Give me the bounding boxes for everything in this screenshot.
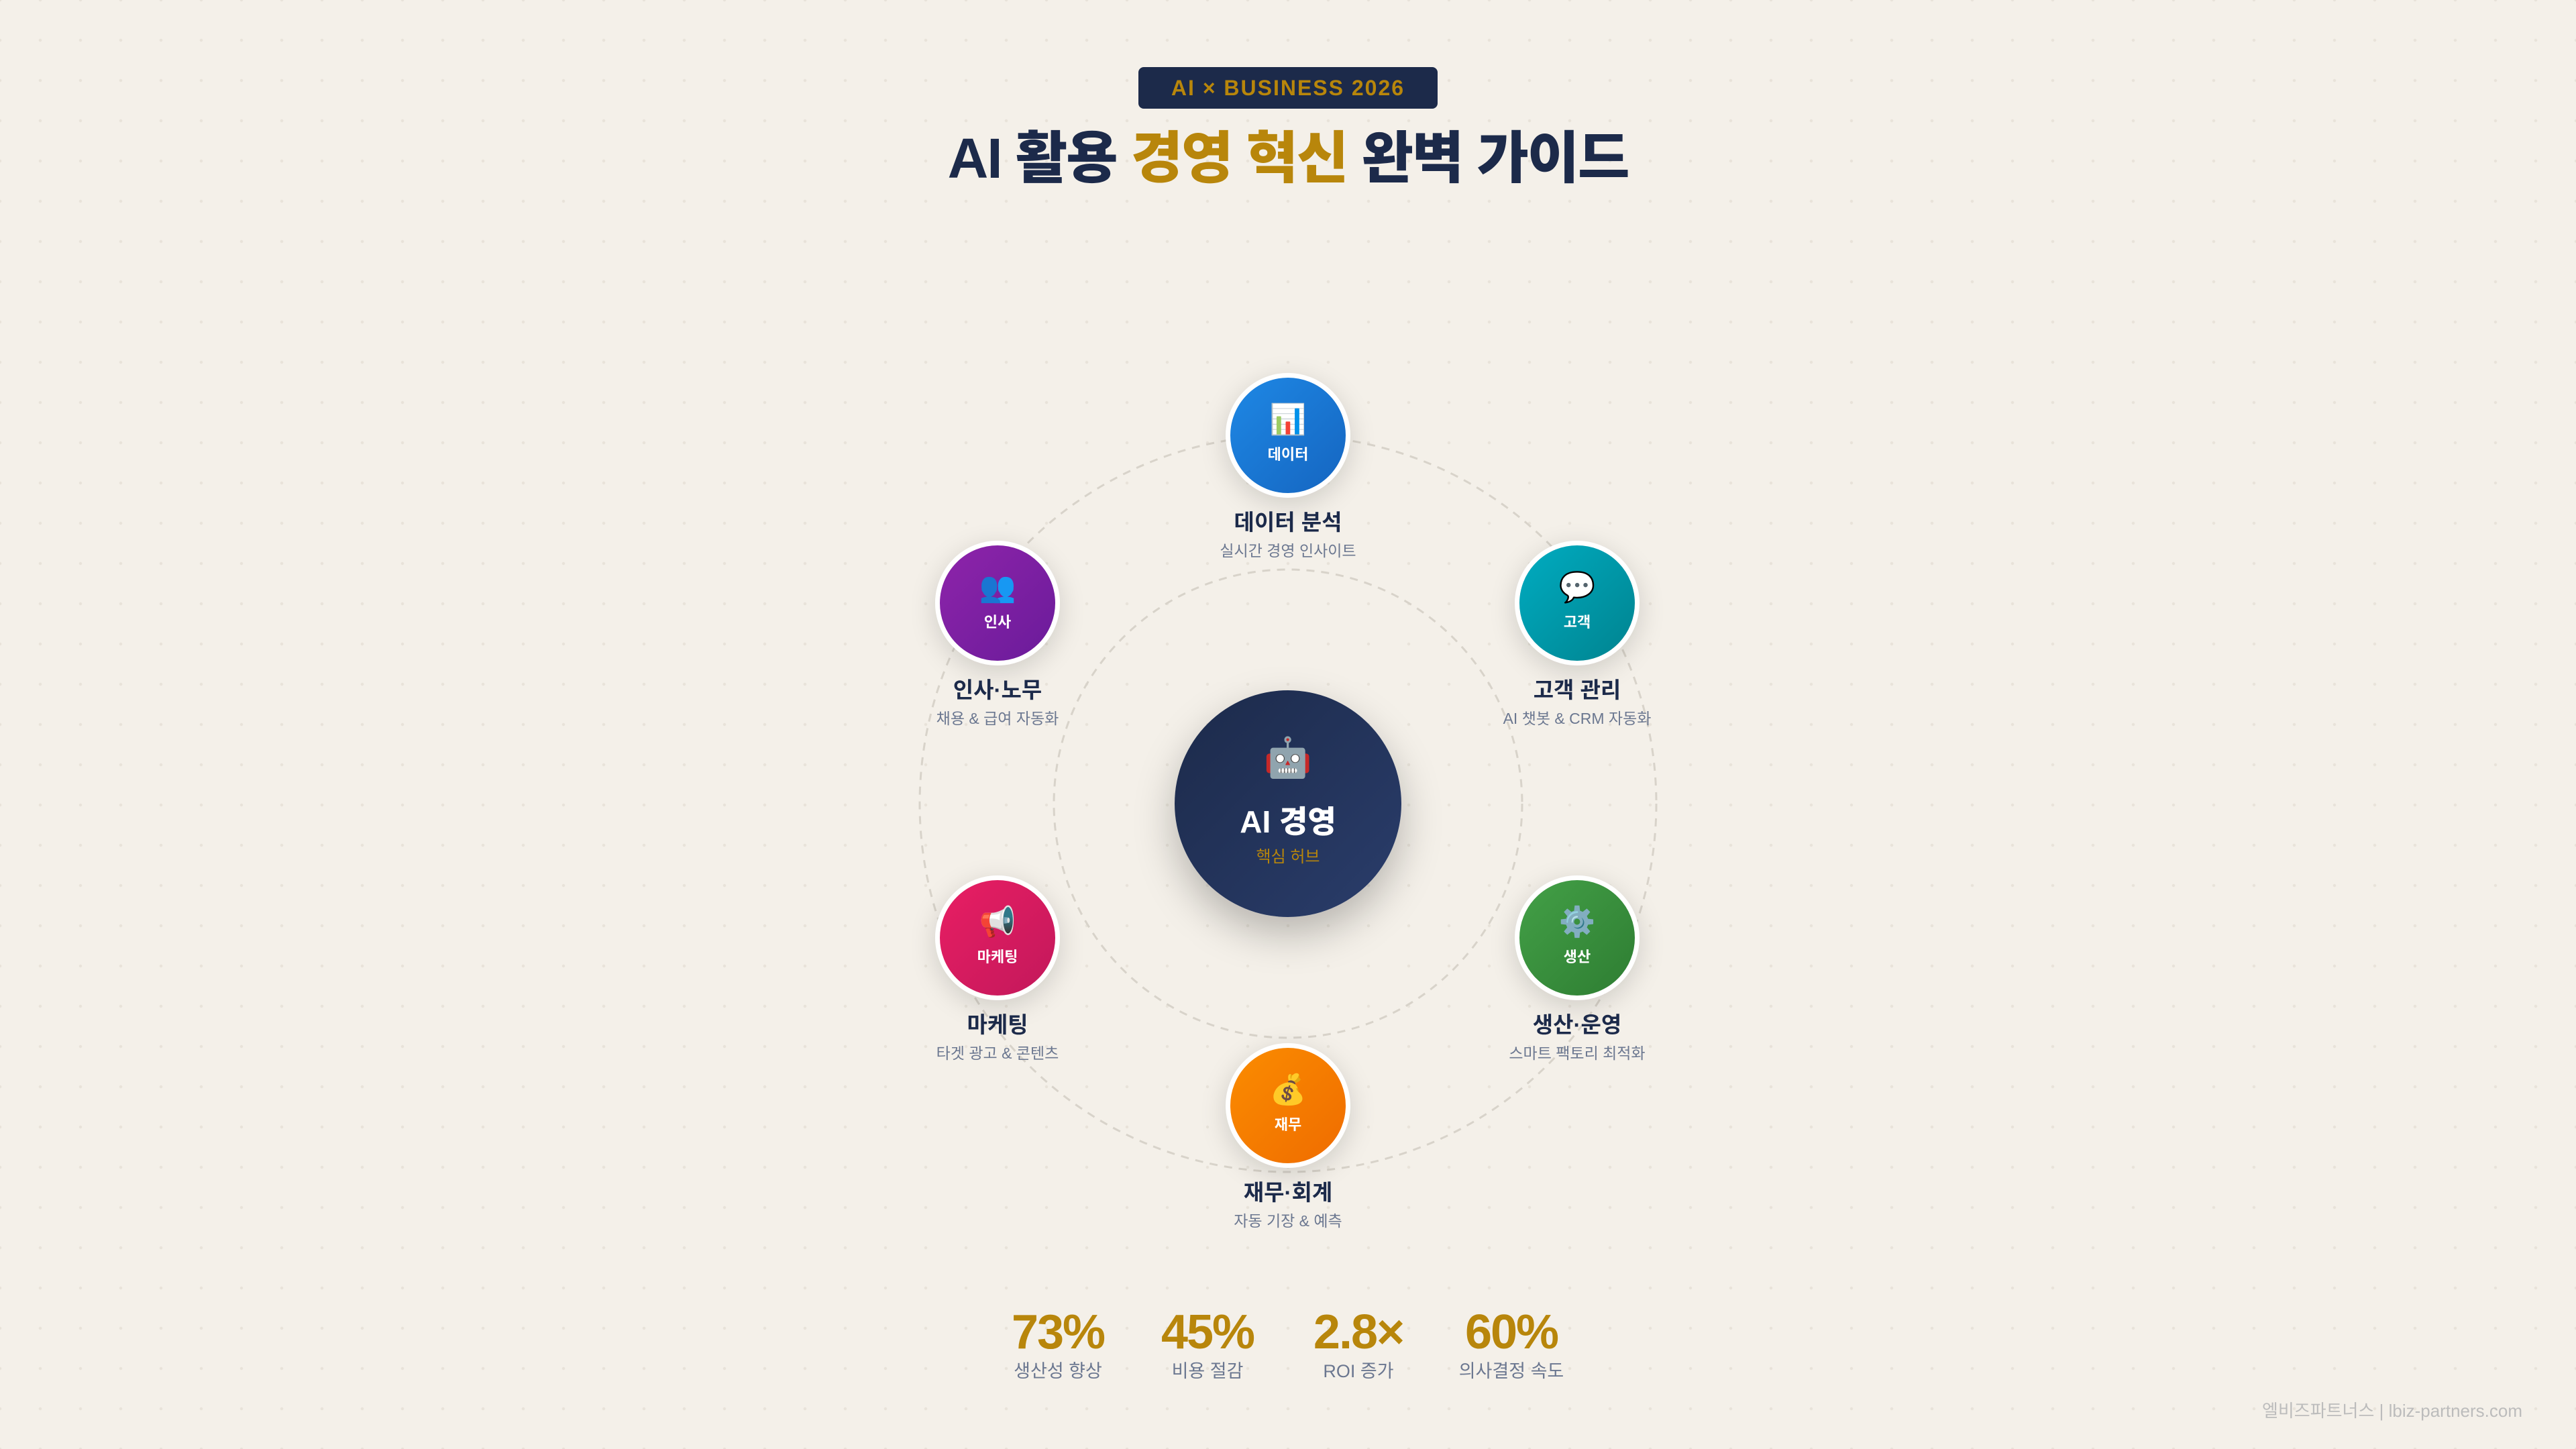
node: HR: 인사 xyxy=(984,614,1011,631)
node: production: ⚙️ xyxy=(1559,906,1595,938)
caption: customer xyxy=(1503,678,1651,727)
badge: AI × BUSINESS 2026 xyxy=(1171,75,1405,99)
node: finance xyxy=(1226,1043,1350,1168)
title: AI 활용 경영 혁신 완벽 가이드 xyxy=(948,127,1628,190)
caption: finance: 자동 기장 & 예측 xyxy=(1234,1212,1342,1230)
center hub xyxy=(1175,690,1401,917)
stat: ROI: ROI 증가 xyxy=(1323,1361,1394,1381)
caption: finance xyxy=(1234,1180,1342,1230)
stat: ROI: 2.8× xyxy=(1313,1305,1403,1359)
caption: customer: AI 챗봇 & CRM 자동화 xyxy=(1503,710,1651,727)
node: customer: 💬 xyxy=(1559,571,1595,604)
node: marketing xyxy=(935,875,1060,1000)
center hub: AI 경영 xyxy=(1240,804,1336,839)
node: marketing: 📢 xyxy=(979,906,1016,938)
node: data: 📊 xyxy=(1270,403,1306,436)
caption: production: 생산·운영 xyxy=(1533,1012,1621,1037)
stat: cost: 45% xyxy=(1161,1305,1254,1359)
node: production xyxy=(1515,875,1640,1000)
caption: data: 실시간 경영 인사이트 xyxy=(1220,542,1356,559)
node: production: 생산 xyxy=(1564,949,1591,965)
caption: customer: 고객 관리 xyxy=(1534,678,1621,702)
node: customer: 고객 xyxy=(1564,614,1591,631)
caption: HR: 채용 & 급여 자동화 xyxy=(936,710,1059,727)
caption: HR: 인사·노무 xyxy=(953,678,1042,702)
caption: finance: 재무·회계 xyxy=(1244,1180,1332,1205)
footer: 엘비즈파트너스 | lbiz-partners.com xyxy=(2262,1401,2522,1421)
stat: productivity: 73% xyxy=(1012,1305,1104,1359)
node: data xyxy=(1226,373,1350,498)
caption: marketing: 마케팅 xyxy=(967,1012,1028,1037)
caption: production: 스마트 팩토리 최적화 xyxy=(1509,1044,1646,1062)
stat: productivity: 생산성 향상 xyxy=(1014,1361,1102,1381)
node: data: 데이터 xyxy=(1268,446,1308,463)
stat: decision: 60% xyxy=(1465,1305,1558,1359)
caption: production xyxy=(1509,1012,1646,1062)
node: customer xyxy=(1515,541,1640,665)
stat: decision xyxy=(1459,1305,1564,1381)
caption: marketing xyxy=(936,1012,1059,1062)
node: finance: 💰 xyxy=(1270,1073,1306,1106)
stat: cost: 비용 절감 xyxy=(1172,1361,1243,1381)
node: HR xyxy=(935,541,1060,665)
node: marketing: 마케팅 xyxy=(977,949,1018,965)
caption: HR xyxy=(936,678,1059,727)
caption: data: 데이터 분석 xyxy=(1234,510,1342,535)
caption: marketing: 타겟 광고 & 콘텐츠 xyxy=(936,1044,1059,1062)
stat: decision: 의사결정 속도 xyxy=(1459,1361,1564,1381)
node: finance: 재무 xyxy=(1275,1116,1301,1133)
center hub: 🤖 xyxy=(1264,735,1312,780)
center hub: 핵심 허브 xyxy=(1256,848,1320,865)
badge xyxy=(1138,67,1438,109)
caption: data xyxy=(1220,510,1356,559)
node: HR: 👥 xyxy=(979,571,1016,604)
